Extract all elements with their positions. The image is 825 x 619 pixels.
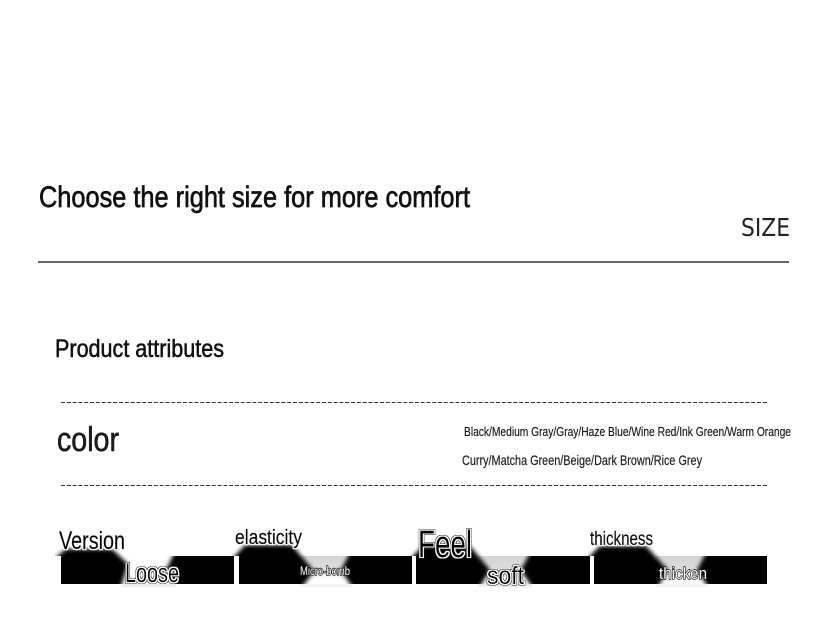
feel heading: Feel bbox=[418, 524, 472, 566]
attribute: elasticity bbox=[230, 528, 412, 587]
elasticity heading: elasticity bbox=[235, 527, 302, 549]
version bar bbox=[55, 545, 234, 587]
attribute: feel bbox=[408, 528, 590, 587]
attribute: thickness bbox=[586, 530, 767, 587]
colour list bbox=[462, 425, 791, 468]
elasticity value: Micro-bomb bbox=[300, 566, 350, 578]
version heading: Version bbox=[59, 527, 125, 555]
header rule bbox=[38, 261, 789, 263]
feel bar bbox=[411, 545, 602, 590]
thickness heading: thickness bbox=[590, 529, 653, 550]
colour row label: color bbox=[57, 421, 119, 459]
attribute: version bbox=[55, 530, 234, 587]
elasticity bar bbox=[233, 545, 424, 590]
thickness value: thicken bbox=[659, 564, 707, 583]
thickness bar bbox=[588, 545, 781, 590]
section heading: product attributes: Product attributes bbox=[55, 335, 224, 363]
size label: SIZE bbox=[741, 213, 790, 242]
version value: Loose bbox=[125, 558, 179, 588]
feel value: soft bbox=[487, 562, 524, 590]
title: Choose the right size for more comfort bbox=[39, 181, 471, 214]
colour list: Curry/Matcha Green/Beige/Dark Brown/Rice Grey bbox=[462, 452, 702, 468]
